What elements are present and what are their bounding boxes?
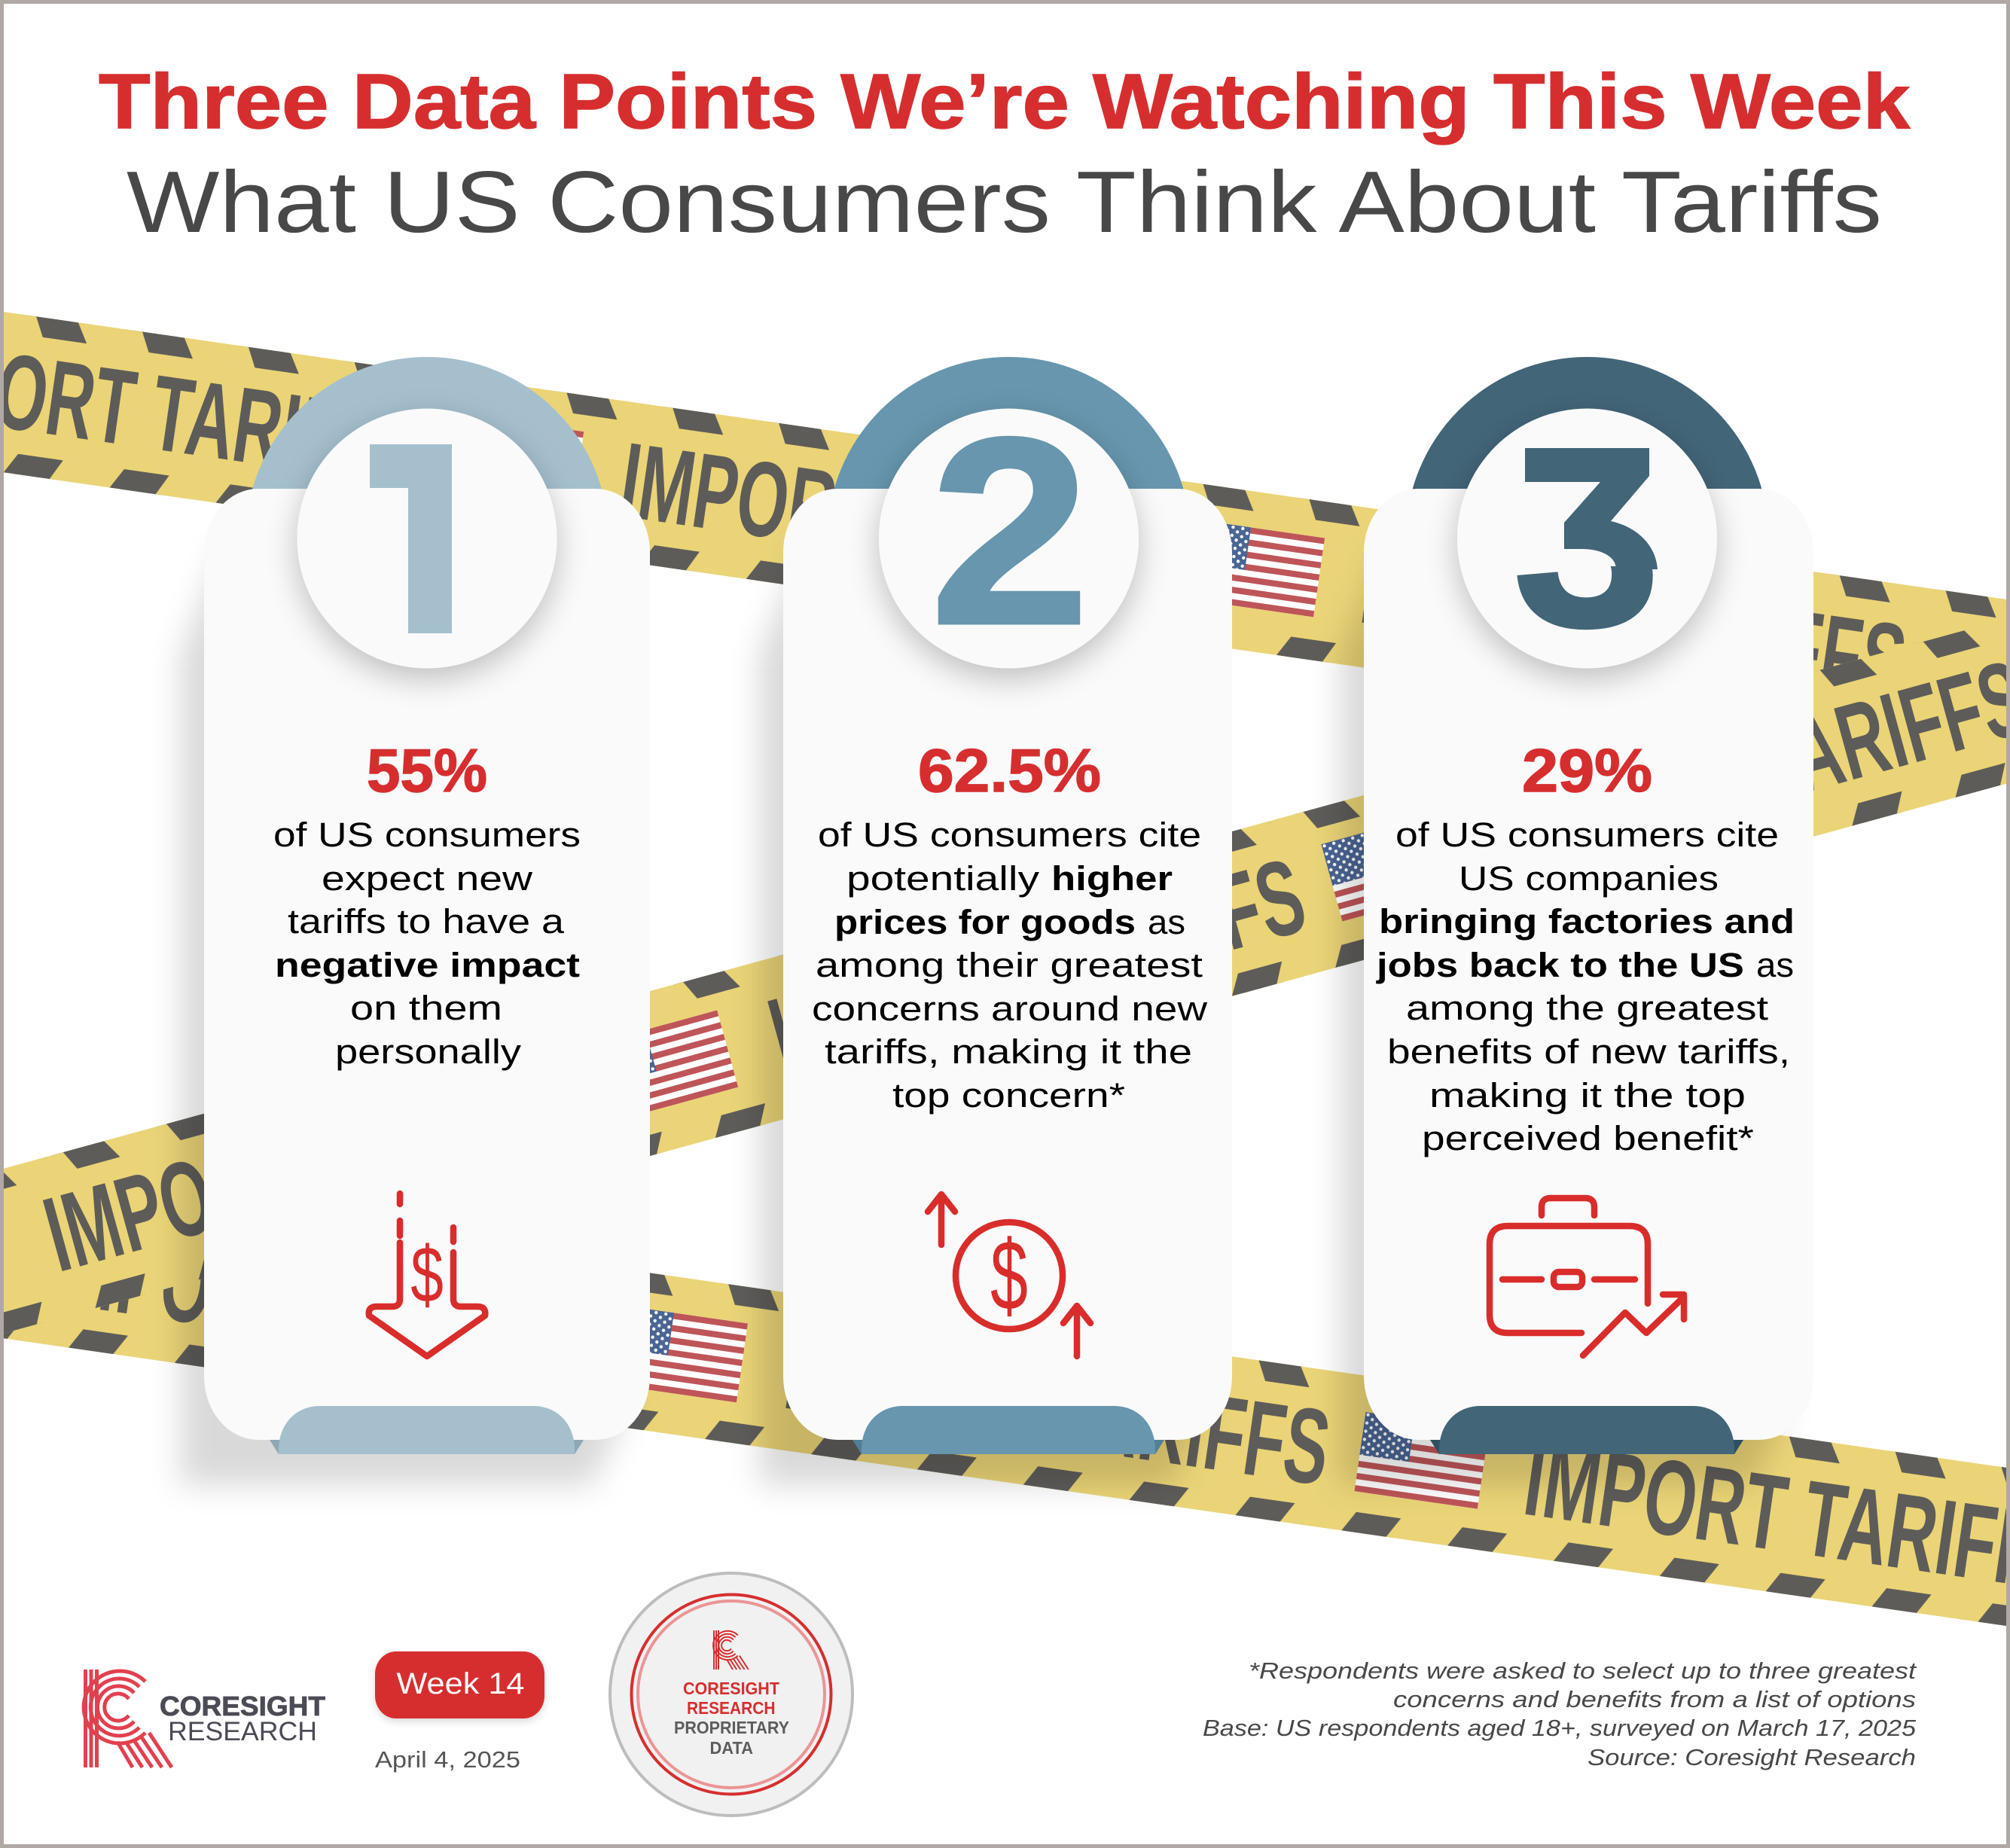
caution tape: rising band: IMPORT TARIFFS [32,1035,592,1295]
description 2: higher [1051,859,1173,898]
caution tape: lower band: IMPORT TARIFFS [37,1206,596,1402]
title line 1: Three Data Points We’re Watching This Week [99,58,1911,145]
stat 2: 62.5% [918,737,1101,805]
description 1: personally [335,1032,522,1071]
seal: proprietary data [610,1573,852,1816]
description 1 [273,816,581,1071]
bottom tab 2 [862,1406,1155,1454]
icon: dollar coin with up arrows [928,1194,1090,1356]
caution tape: lower band: IMPORT TARIFFS [778,1312,1337,1508]
card body 1 [204,489,650,1440]
bottom tab 3 [1439,1406,1734,1454]
card shadows [181,542,1781,1485]
footnote and source: concerns and benefits from a list of options [1393,1686,1916,1712]
number 1: 1 [337,386,508,691]
footnote and source: Source: Coresight Research [1588,1744,1916,1770]
title [99,58,1911,251]
number arc 2 [827,357,1190,720]
description 3: making it the top [1429,1076,1746,1115]
description 1: expect new [322,859,533,898]
icon: falling dollar arrow [369,1194,485,1356]
title line 2: What US Consumers Think About Tariffs [127,153,1882,251]
description 3: among the greatest [1406,989,1769,1027]
number badge 1 [297,408,557,669]
description 1: of US consumers [273,816,581,854]
icon: briefcase with rising trend [1490,1198,1684,1356]
footnote and source [1203,1657,1917,1770]
number 3 [1517,448,1658,630]
footer: Coresight Research logo [84,1670,325,1767]
footnote and source: *Respondents were asked to select up to three greatest [1249,1657,1917,1684]
description 2: concerns around new [812,990,1208,1028]
footer: Coresight Research logo: RESEARCH [168,1717,317,1746]
icon: dollar coin with up arrows: $ [990,1220,1028,1331]
description 1: negative impact [275,946,580,984]
description 2: of US consumers cite [818,816,1201,854]
bottom tab 1 [279,1406,575,1454]
panel: card 3 [1364,357,1813,1454]
seal: proprietary data: CORESIGHT [683,1679,779,1698]
number 3: 3 [1513,393,1661,680]
description 2 [812,816,1208,1115]
description 2: prices for goods [834,903,1136,941]
description 3: US companies [1459,859,1719,898]
seal: proprietary data: DATA [709,1738,753,1758]
description 2: tariffs, making it the [825,1032,1192,1071]
description 1: on them [350,989,502,1027]
description 3 [1376,816,1795,1157]
caution tape: upper band [0,296,2010,764]
seal: proprietary data: RESEARCH [687,1698,776,1718]
description 3: bringing factories and [1379,902,1795,941]
caution tape: lower band [0,1173,2010,1635]
number 1 [370,444,452,633]
bottom tab fold 3 [1430,1440,1743,1454]
date: April 4, 2025 [375,1746,520,1773]
panel: card 1 [204,357,650,1454]
number arc 3 [1405,357,1768,720]
caution tape: rising band [0,602,2010,1334]
bottom tab fold 2 [852,1440,1164,1454]
caution tape: rising band: IMPORT TARIFFS [758,836,1317,1096]
footnote and source: Base: US respondents aged 18+, surveyed on March 17, 2025 [1203,1715,1917,1741]
caution tape: upper band: IMPORT TARIFFS [613,420,1173,617]
icon: falling dollar arrow: $ [410,1230,444,1319]
description 1: tariffs to have a [288,902,565,941]
description 3: benefits of new tariffs, [1387,1032,1790,1071]
description 2: as [1148,903,1185,941]
description 3: perceived benefit* [1422,1119,1754,1157]
number 2: 2 [930,383,1090,679]
description 2: top concern* [892,1076,1125,1115]
bottom tab fold 1 [270,1440,584,1454]
card body 2 [783,489,1232,1440]
description 2: among their greatest [816,946,1203,984]
description 3: of US consumers cite [1395,816,1779,854]
panel: card 2 [783,357,1232,1454]
number badge 3 [1457,408,1717,669]
number badge 2 [879,408,1139,669]
description 3: as [1756,946,1794,984]
description 3: jobs back to the US [1376,946,1744,984]
week badge: Week 14 [396,1667,524,1700]
description 2: potentially [846,859,1040,898]
footer: Coresight Research logo: CORESIGHT [160,1691,325,1721]
number arc 1 [246,357,608,720]
week badge [375,1651,544,1718]
seal: proprietary data: PROPRIETARY [674,1718,789,1737]
stat 3: 29% [1522,737,1652,805]
card body 3 [1364,489,1813,1440]
stat 1: 55% [367,737,487,805]
